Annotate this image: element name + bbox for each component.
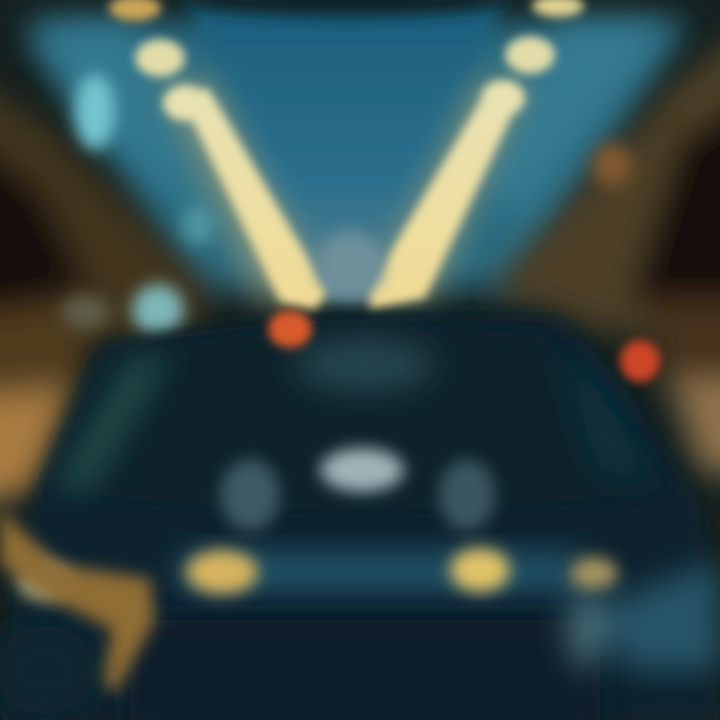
top dark edge — [180, 0, 510, 16]
red light — [620, 340, 660, 382]
left light beam — [109, 0, 328, 310]
windshield right reflection — [560, 350, 650, 480]
rear-view mirror glow — [295, 339, 435, 391]
beam glow — [160, 80, 530, 305]
right light beam — [368, 0, 584, 310]
left tunnel wall — [0, 70, 210, 510]
right seat — [439, 459, 495, 531]
left wall panel glow — [25, 25, 230, 240]
right headlight — [450, 548, 510, 592]
left seat — [220, 459, 280, 531]
car body — [0, 315, 720, 720]
windshield left reflection — [55, 355, 170, 490]
right tunnel wall — [490, 20, 720, 480]
far right lamp — [570, 557, 618, 591]
dashboard centre light — [320, 448, 404, 492]
left foreground object — [0, 510, 155, 715]
right wall panel glow — [490, 25, 670, 230]
left headlight — [186, 550, 258, 594]
hood — [180, 552, 580, 592]
right fender — [569, 560, 720, 670]
orange light — [268, 310, 312, 348]
pale cyan wall lights — [61, 74, 632, 336]
car windshield — [50, 328, 670, 510]
